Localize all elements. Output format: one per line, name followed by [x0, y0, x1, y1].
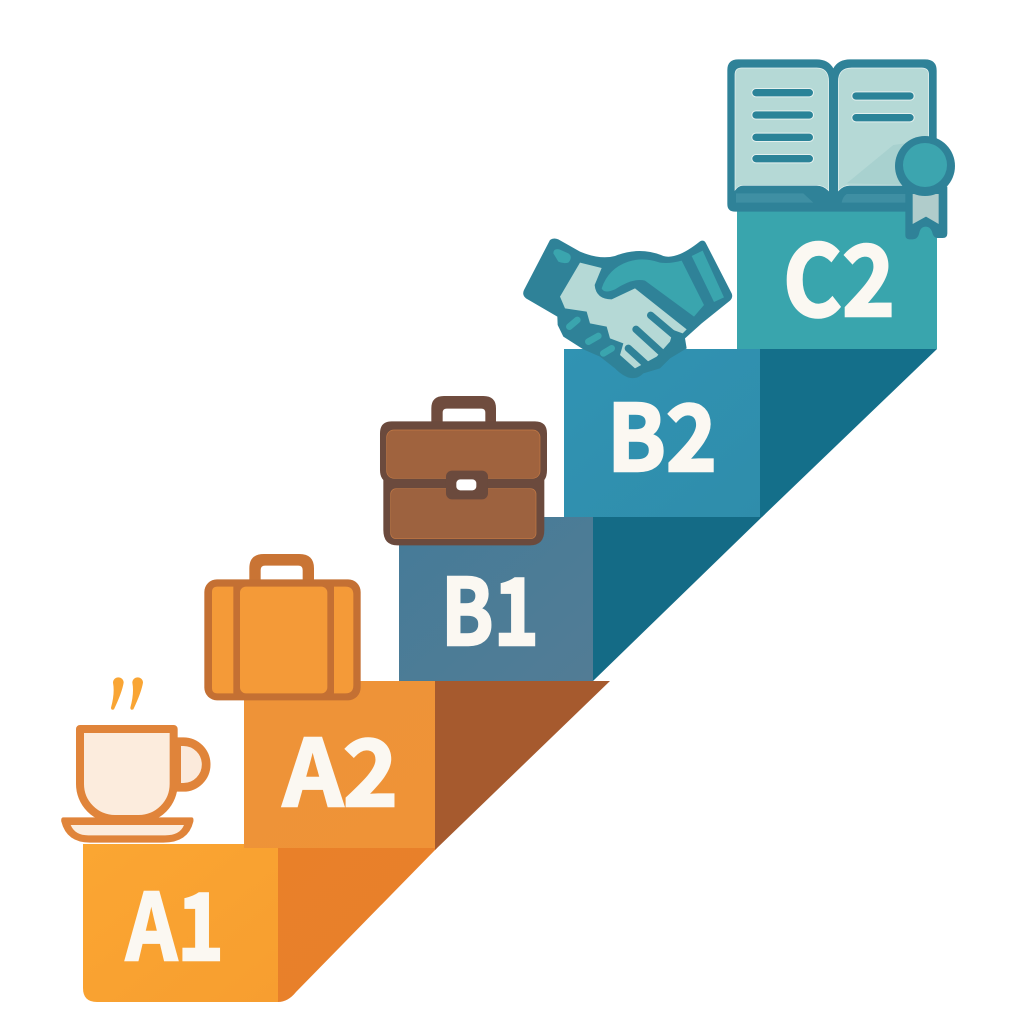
left page lines	[756, 93, 809, 159]
step C2	[737, 203, 937, 349]
step B1 front face	[399, 517, 593, 681]
cup body	[80, 729, 174, 819]
book cover	[727, 59, 937, 212]
suitcase right strap panel	[334, 587, 353, 693]
right page lines	[856, 96, 910, 118]
medal outer	[895, 136, 955, 196]
right book edge	[842, 194, 910, 203]
suitcase body	[204, 579, 361, 700]
left cuff highlight	[553, 249, 571, 263]
steam	[111, 677, 143, 710]
knuckles	[569, 320, 612, 353]
left book edge	[736, 193, 813, 203]
briefcase lower panel	[391, 489, 536, 539]
label B2: B2	[607, 365, 717, 498]
saucer	[61, 817, 193, 843]
icon: certificate ribbon	[895, 136, 955, 239]
briefcase body	[380, 421, 547, 545]
right cuff	[692, 251, 724, 302]
icon: coffee cup	[61, 677, 206, 843]
handshake silhouette	[523, 238, 732, 378]
cup handle	[177, 742, 206, 787]
step B1 side face	[593, 514, 765, 681]
finger gaps	[628, 315, 677, 365]
step B2	[564, 349, 937, 517]
step C2 front face	[737, 210, 937, 349]
briefcase handle	[431, 396, 496, 423]
label A2: A2	[282, 700, 398, 833]
step A2 side face	[435, 681, 610, 850]
step A2	[244, 681, 610, 850]
icon: open book	[727, 59, 937, 212]
label A1: A1	[125, 854, 224, 987]
ribbon tail	[905, 187, 947, 239]
step B1	[399, 514, 765, 681]
step A1	[83, 844, 437, 1002]
icon: orange suitcase	[204, 554, 361, 700]
briefcase upper panel	[387, 430, 540, 478]
right hand	[602, 259, 704, 317]
label B1: B1	[441, 539, 539, 672]
step A2 front face	[244, 681, 435, 848]
label C2: C2	[783, 203, 895, 345]
page fold	[847, 140, 929, 185]
left hand	[560, 263, 687, 368]
suitcase handle	[249, 554, 314, 583]
ribbon inner	[913, 194, 939, 224]
suitcase centre panel	[240, 587, 327, 693]
briefcase clasp	[456, 479, 476, 490]
step A1 side face	[276, 844, 437, 1002]
left page	[735, 68, 829, 191]
icon: handshake	[523, 238, 732, 378]
medal inner	[903, 143, 947, 187]
step B2 side face	[760, 349, 937, 517]
step A1 front face	[83, 844, 278, 1002]
briefcase clasp plate	[446, 471, 488, 499]
right page	[838, 68, 929, 191]
saucer inner	[71, 825, 184, 835]
icon: brown briefcase	[380, 396, 547, 545]
suitcase left strap panel	[212, 587, 233, 693]
step B2 front face	[564, 349, 760, 517]
